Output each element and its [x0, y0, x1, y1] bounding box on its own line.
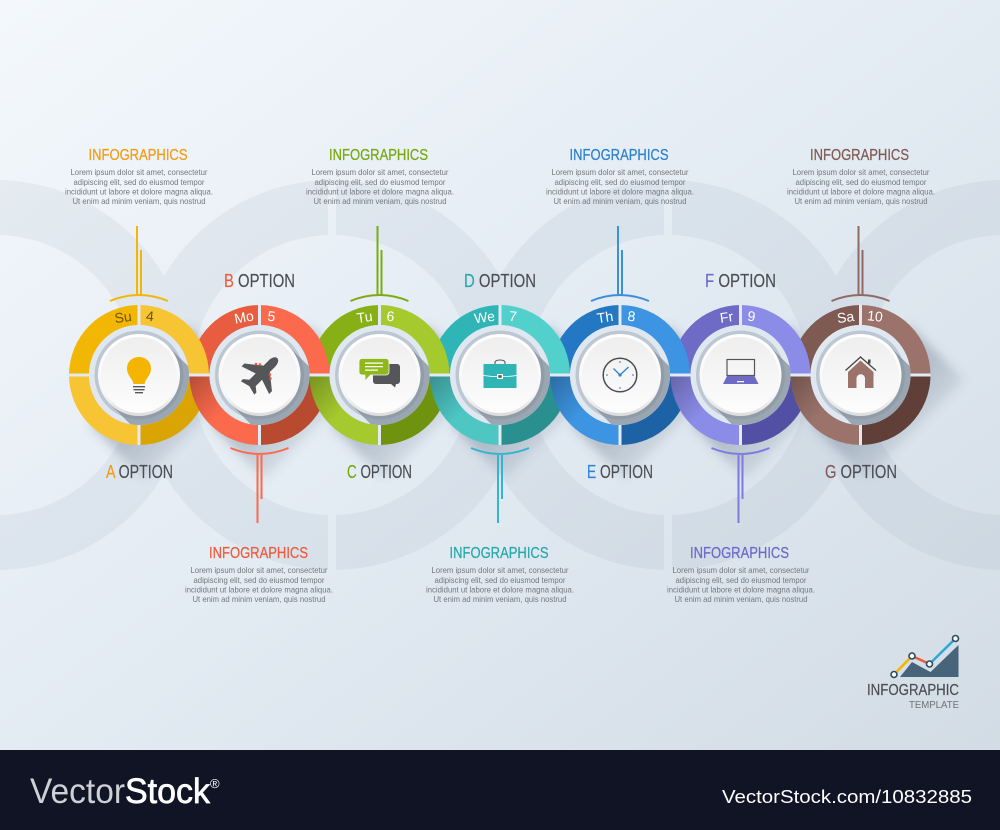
ring segments: top left — [69, 305, 860, 375]
node 3: Tu 6: 6 — [386, 308, 395, 324]
ring segments: bottom right — [139, 375, 930, 445]
text block: B: incididunt ut labore et dolore magna aliqua. — [185, 584, 333, 594]
text block: D: Lorem ipsum dolor sit amet, consectetur — [432, 565, 569, 575]
text block: E: adipiscing elit, sed do eiusmod tempor — [554, 177, 686, 187]
node 4: We 7 — [430, 305, 615, 490]
text block: B: Lorem ipsum dolor sit amet, consectetur — [190, 565, 328, 575]
text block: C: Ut enim ad minim veniam, quis nostrud — [314, 196, 447, 206]
text block: C: adipiscing elit, sed do eiusmod tempor — [314, 177, 446, 187]
node 7: Sa 10: Sa — [836, 308, 855, 326]
text block: E: INFOGRAPHICS — [570, 147, 668, 164]
text block: F: INFOGRAPHICS — [690, 545, 789, 562]
text block: A: INFOGRAPHICS — [88, 147, 188, 164]
label: G OPTION: G OPTION — [825, 462, 897, 482]
text block: B: INFOGRAPHICS — [209, 545, 308, 562]
background decorative rings — [0, 180, 1000, 570]
node 1: Su 4: 4 — [145, 308, 155, 324]
text block: E: Lorem ipsum dolor sit amet, consectetur — [552, 167, 689, 177]
node 7: Sa 10 — [790, 305, 976, 490]
node 5: Th 8: Th — [596, 308, 614, 326]
icon: airplane — [234, 344, 291, 402]
text block: B: Ut enim ad minim veniam, quis nostrud — [192, 594, 326, 604]
text block: C: Lorem ipsum dolor sit amet, consectetur — [312, 167, 449, 177]
logo: infographic template — [867, 636, 959, 711]
node 3: Tu 6 — [310, 305, 494, 490]
footer logo: VectorStock: Stock — [125, 772, 210, 811]
footer bar — [0, 750, 1000, 830]
label: D OPTION: D OPTION — [464, 271, 536, 291]
text block: G: Ut enim ad minim veniam, quis nostrud — [794, 196, 928, 206]
text block: G: adipiscing elit, sed do eiusmod tempor — [796, 177, 927, 187]
text block: C: incididunt ut labore et dolore magna aliqua. — [306, 186, 454, 196]
leader: node 5 top — [591, 226, 649, 301]
node 5: Th 8: 8 — [627, 308, 636, 324]
leader: node 2 bottom — [230, 448, 288, 523]
text block: A: adipiscing elit, sed do eiusmod tempor — [74, 177, 205, 187]
text block: D: adipiscing elit, sed do eiusmod tempor — [434, 575, 566, 585]
footer logo: VectorStock: Vector — [30, 772, 125, 811]
icon: house — [846, 357, 876, 388]
text block: E: incididunt ut labore et dolore magna aliqua. — [546, 186, 694, 196]
node 7: Sa 10: 10 — [866, 307, 884, 325]
leader: node 1 top — [110, 226, 168, 301]
icon: clock — [603, 358, 637, 392]
text block: D: incididunt ut labore et dolore magna aliqua. — [426, 584, 574, 594]
text block: F: Lorem ipsum dolor sit amet, consectetur — [672, 565, 810, 575]
icon: laptop — [723, 360, 758, 384]
node 6: Fr 9: Fr — [719, 308, 734, 326]
node 1: Su 4 — [69, 305, 254, 490]
node 2: Mo 5 — [190, 305, 374, 490]
node 4: We 7: We — [473, 308, 496, 326]
text block: A: Ut enim ad minim veniam, quis nostrud — [72, 196, 206, 206]
long ring shadows — [90, 326, 964, 479]
text block: F: Ut enim ad minim veniam, quis nostrud — [674, 594, 808, 604]
logo: infographic template: INFOGRAPHIC — [867, 682, 959, 699]
text block: G: Lorem ipsum dolor sit amet, consectetur — [792, 167, 930, 177]
text block: B: adipiscing elit, sed do eiusmod tempor — [194, 575, 325, 585]
text block: G: INFOGRAPHICS — [810, 147, 909, 164]
leader: node 3 top — [350, 226, 408, 301]
leader: node 7 top — [832, 226, 890, 301]
text block: A — [65, 147, 213, 206]
text block: A: incididunt ut labore et dolore magna aliqua. — [65, 186, 213, 196]
text block: G: incididunt ut labore et dolore magna aliqua. — [787, 186, 935, 196]
text block: D: INFOGRAPHICS — [450, 545, 548, 562]
text block: F: adipiscing elit, sed do eiusmod tempor — [676, 575, 807, 585]
text block: C: INFOGRAPHICS — [329, 147, 428, 164]
label: E OPTION: E OPTION — [587, 462, 653, 482]
label: A OPTION: A OPTION — [106, 462, 173, 482]
footer url: VectorStock.com/10832885 — [722, 787, 972, 807]
node 1: Su 4: Su — [113, 308, 133, 326]
node 4: We 7: 7 — [508, 308, 518, 324]
logo: infographic template: TEMPLATE — [909, 699, 959, 711]
leader: node 6 bottom — [712, 448, 770, 523]
label: C OPTION: C OPTION — [347, 462, 412, 482]
node 2: Mo 5: Mo — [233, 307, 255, 327]
text block: G — [787, 147, 935, 206]
text block: C — [306, 147, 454, 206]
label: B OPTION: B OPTION — [224, 271, 295, 291]
icon: light bulb — [127, 357, 151, 393]
text block: F: incididunt ut labore et dolore magna aliqua. — [667, 584, 815, 594]
footer logo: VectorStock: ® — [210, 776, 220, 791]
label: F OPTION: F OPTION — [705, 271, 776, 291]
node 2: Mo 5: 5 — [267, 308, 276, 324]
text block: F — [667, 545, 815, 604]
ring segments: top right — [139, 305, 930, 375]
ring segments: bottom left — [69, 375, 860, 445]
text block: D — [426, 545, 574, 604]
node 6: Fr 9 — [670, 305, 856, 490]
text block: E: Ut enim ad minim veniam, quis nostrud — [554, 196, 687, 206]
icon: speech bubbles — [359, 358, 400, 388]
text block: D: Ut enim ad minim veniam, quis nostrud — [434, 594, 567, 604]
footer logo: VectorStock — [30, 772, 220, 811]
text block: E — [546, 147, 694, 206]
text block: B — [185, 545, 333, 604]
node 5: Th 8 — [550, 305, 735, 490]
leader: node 4 bottom — [471, 448, 529, 523]
icon: briefcase — [484, 360, 516, 388]
node 6: Fr 9: 9 — [747, 308, 756, 324]
node 3: Tu 6: Tu — [356, 308, 373, 326]
text block: A: Lorem ipsum dolor sit amet, consectetur — [70, 167, 208, 177]
